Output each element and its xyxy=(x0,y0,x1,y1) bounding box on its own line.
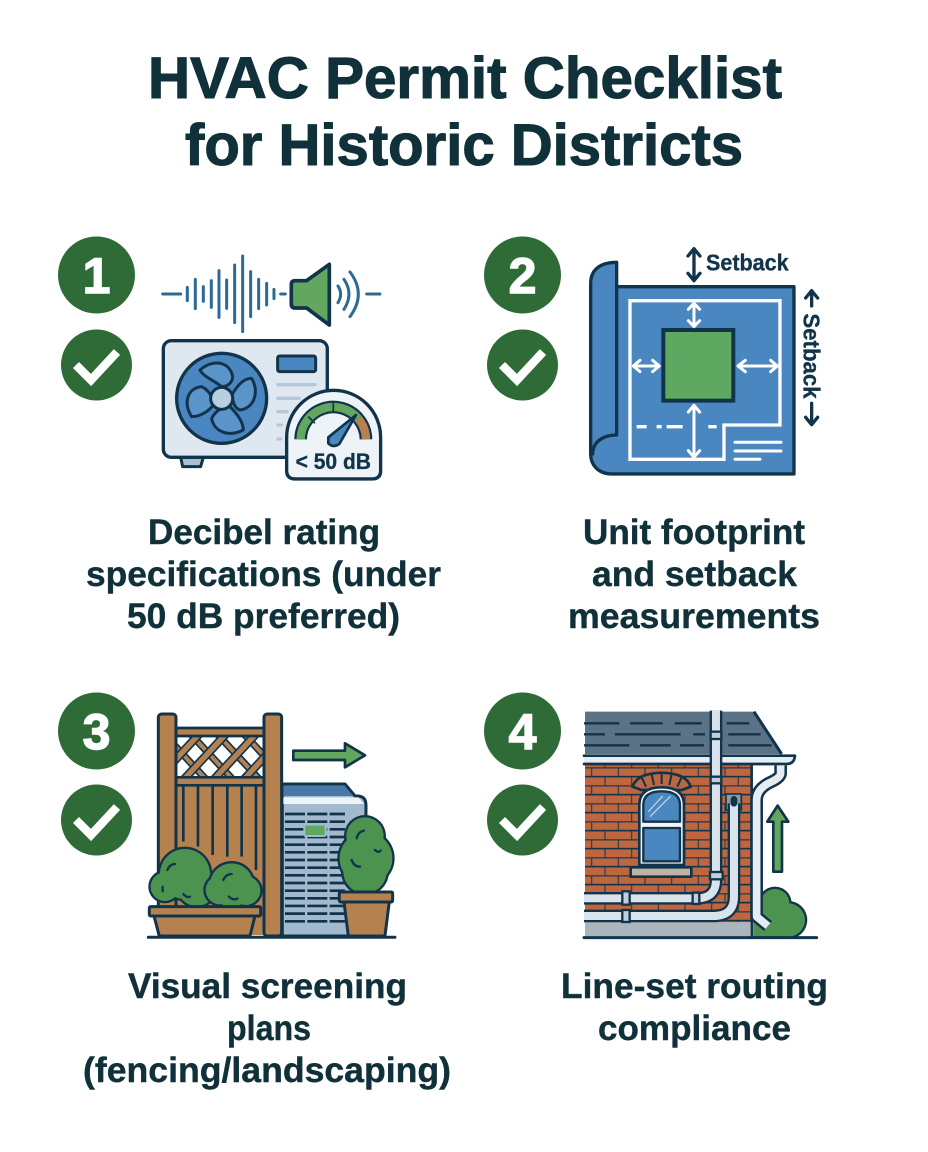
right shrub xyxy=(337,815,395,896)
green arrow xyxy=(293,743,365,767)
speaker xyxy=(291,264,329,325)
unit footprint xyxy=(663,330,733,401)
pipe couplings xyxy=(622,732,723,922)
number badge 3 xyxy=(58,692,135,770)
icon: blueprint site plan: Setback xyxy=(798,313,824,399)
check badge 3 xyxy=(61,784,132,856)
label 4 xyxy=(561,967,828,1048)
icon: blueprint site plan xyxy=(591,249,824,474)
sound wave xyxy=(163,256,380,332)
panel: line-set routing xyxy=(484,692,828,1048)
label 2: Unit footprint xyxy=(583,513,805,552)
green up arrow xyxy=(767,806,788,872)
check badge 4 xyxy=(487,784,558,856)
number badge 4: 4 xyxy=(509,704,537,760)
panel: visual screening xyxy=(58,692,451,1090)
label 3: Visual screening xyxy=(128,967,407,1006)
gauge xyxy=(287,390,381,479)
icon: air conditioner with sound wave and gauge xyxy=(163,256,381,479)
plan outline xyxy=(630,301,780,459)
label 3: plans xyxy=(227,1009,311,1048)
fence xyxy=(157,714,287,936)
lattice xyxy=(178,737,262,776)
ground line xyxy=(584,933,817,942)
label 1: specifications (under xyxy=(86,555,441,594)
number badge 1 xyxy=(58,236,135,314)
label 4: compliance xyxy=(598,1009,791,1048)
foundation xyxy=(585,922,751,936)
dark setback arrows xyxy=(688,249,818,425)
label 2: measurements xyxy=(568,597,820,636)
number badge 4 xyxy=(484,692,561,770)
label 1: 50 dB preferred) xyxy=(127,597,400,636)
label 4: Line-set routing xyxy=(561,967,828,1006)
downspout xyxy=(757,765,781,926)
title: HVAC Permit Checklist xyxy=(148,46,782,111)
line-set pipes xyxy=(584,711,734,916)
outdoor unit xyxy=(163,341,327,467)
gauge: < 50 dB xyxy=(296,449,371,474)
left planter xyxy=(149,907,261,936)
title: for Historic Districts xyxy=(185,113,743,178)
title xyxy=(148,46,782,178)
window xyxy=(631,773,691,877)
check badge 1 xyxy=(61,330,132,400)
label 2 xyxy=(568,513,820,636)
number badge 2: 2 xyxy=(509,248,536,304)
right pot xyxy=(339,892,393,936)
setback labels: Setback xyxy=(706,250,789,276)
number badge 1: 1 xyxy=(83,248,110,304)
white dimension arrows xyxy=(633,303,781,459)
roof xyxy=(584,712,782,754)
gutter xyxy=(584,756,795,764)
panel: decibel rating xyxy=(58,236,441,636)
check badge 2 xyxy=(487,330,558,400)
label 1: Decibel rating xyxy=(148,513,380,552)
condenser unit xyxy=(282,784,366,936)
blueprint sheet xyxy=(591,262,794,474)
label 1 xyxy=(86,513,441,636)
label 3 xyxy=(83,967,451,1090)
panel: footprint and setback xyxy=(484,236,824,636)
shrub xyxy=(753,887,807,939)
label 2: and setback xyxy=(592,555,798,594)
ground line xyxy=(148,933,395,942)
left planter shrubs xyxy=(148,847,263,909)
number badge 3: 3 xyxy=(83,704,110,760)
icon: brick house with line set xyxy=(584,711,817,939)
label 3: (fencing/landscaping) xyxy=(83,1051,451,1090)
line-set vent box xyxy=(726,794,741,810)
icon: fence, planters and screened unit xyxy=(148,714,395,937)
number badge 2 xyxy=(484,236,561,314)
brick wall xyxy=(585,765,751,922)
